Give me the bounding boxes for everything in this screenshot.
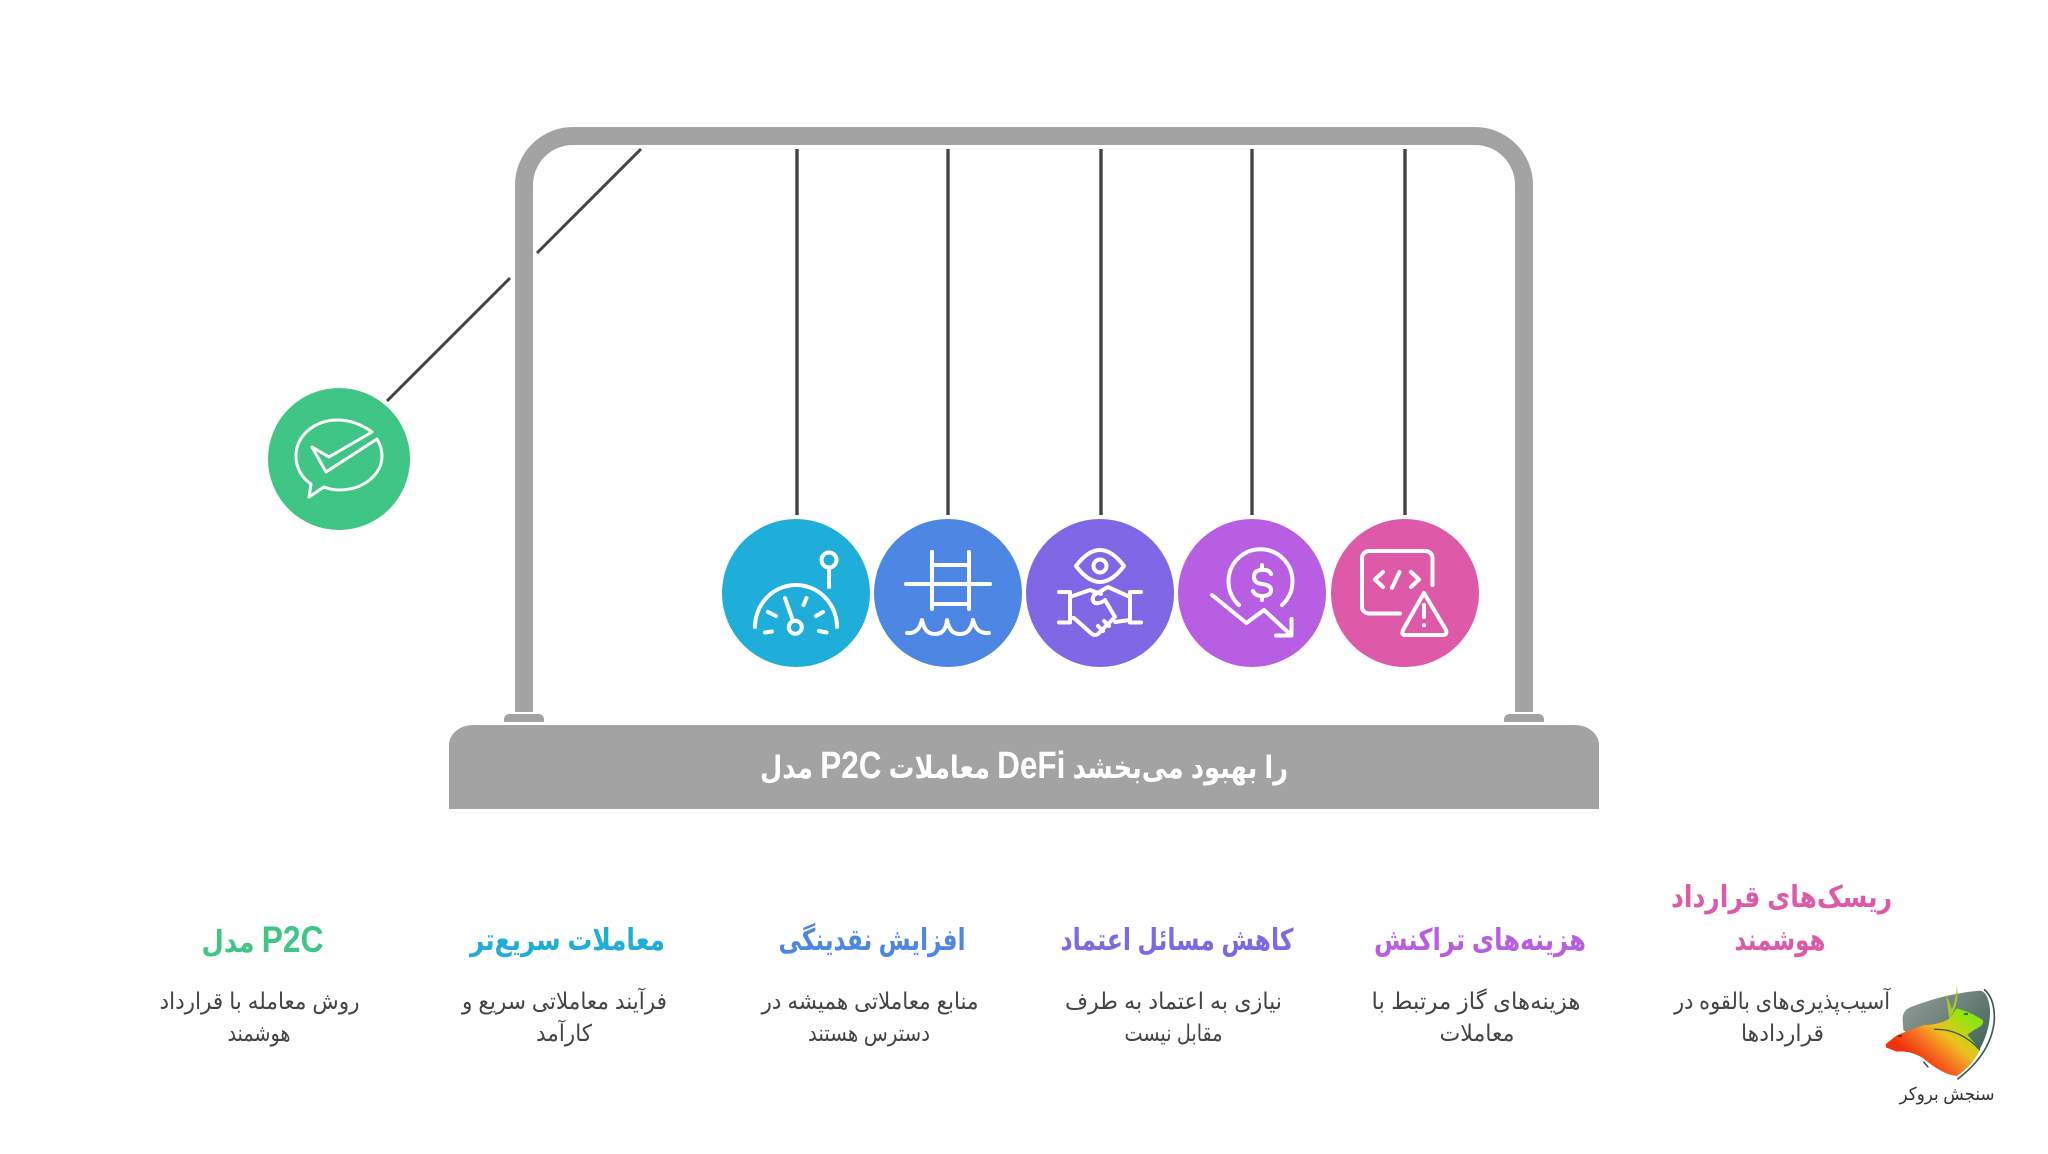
ball: smart contract warning xyxy=(1331,519,1479,667)
column: transaction costs: هزینه‌های گاز مرتبط با xyxy=(1372,988,1580,1015)
column: P2C model xyxy=(160,919,360,1047)
ball: speedometer xyxy=(722,519,870,667)
column: smart contract risks: هوشمند xyxy=(1734,924,1826,957)
logo: broker shield: سنجش بروکر xyxy=(1899,1084,1994,1105)
ball: green chat check xyxy=(268,388,410,530)
column: smart contract risks: ریسک‌های قرارداد xyxy=(1671,881,1892,914)
column: reduced trust issues: کاهش مسائل اعتماد xyxy=(1060,924,1294,957)
column: P2C model: P2C مدل xyxy=(202,919,324,960)
column: smart contract risks xyxy=(1671,881,1892,1047)
column: more liquidity: افزایش نقدینگی xyxy=(778,922,966,957)
column: more liquidity: منابع معاملاتی همیشه در xyxy=(761,988,978,1015)
column: smart contract risks: قراردادها xyxy=(1741,1020,1824,1047)
column: faster trades: معاملات سریع‌تر xyxy=(468,924,665,957)
base bar with title: را بهبود می‌بخشد DeFi معاملات P2C مدل xyxy=(760,745,1288,787)
logo: broker shield xyxy=(1886,985,1994,1105)
column: transaction costs: معاملات xyxy=(1440,1020,1514,1046)
column: reduced trust issues xyxy=(1060,924,1294,1046)
ball: trust handshake xyxy=(1026,519,1174,667)
column: transaction costs: هزینه‌های تراکنش xyxy=(1374,924,1586,957)
ball: liquidity ladder xyxy=(874,519,1022,667)
ball: gas cost dollar xyxy=(1178,519,1326,667)
base bar with title xyxy=(449,725,1599,809)
column: smart contract risks: آسیب‌پذیری‌های بالقوه در xyxy=(1673,987,1891,1015)
column: transaction costs xyxy=(1372,924,1586,1046)
pendulum strings xyxy=(387,149,1405,515)
column: P2C model: روش معامله با قرارداد xyxy=(160,988,360,1015)
column: faster trades: کارآمد xyxy=(536,1019,592,1047)
cradle frame xyxy=(504,136,1544,722)
column: more liquidity xyxy=(761,922,978,1047)
column: reduced trust issues: نیازی به اعتماد به طرف xyxy=(1065,988,1282,1015)
column: faster trades xyxy=(461,924,667,1047)
column: reduced trust issues: مقابل نیست xyxy=(1124,1020,1222,1046)
column: P2C model: هوشمند xyxy=(228,1020,290,1047)
column: more liquidity: دسترس هستند xyxy=(808,1020,930,1047)
column: faster trades: فرآیند معاملاتی سریع و xyxy=(461,987,667,1015)
